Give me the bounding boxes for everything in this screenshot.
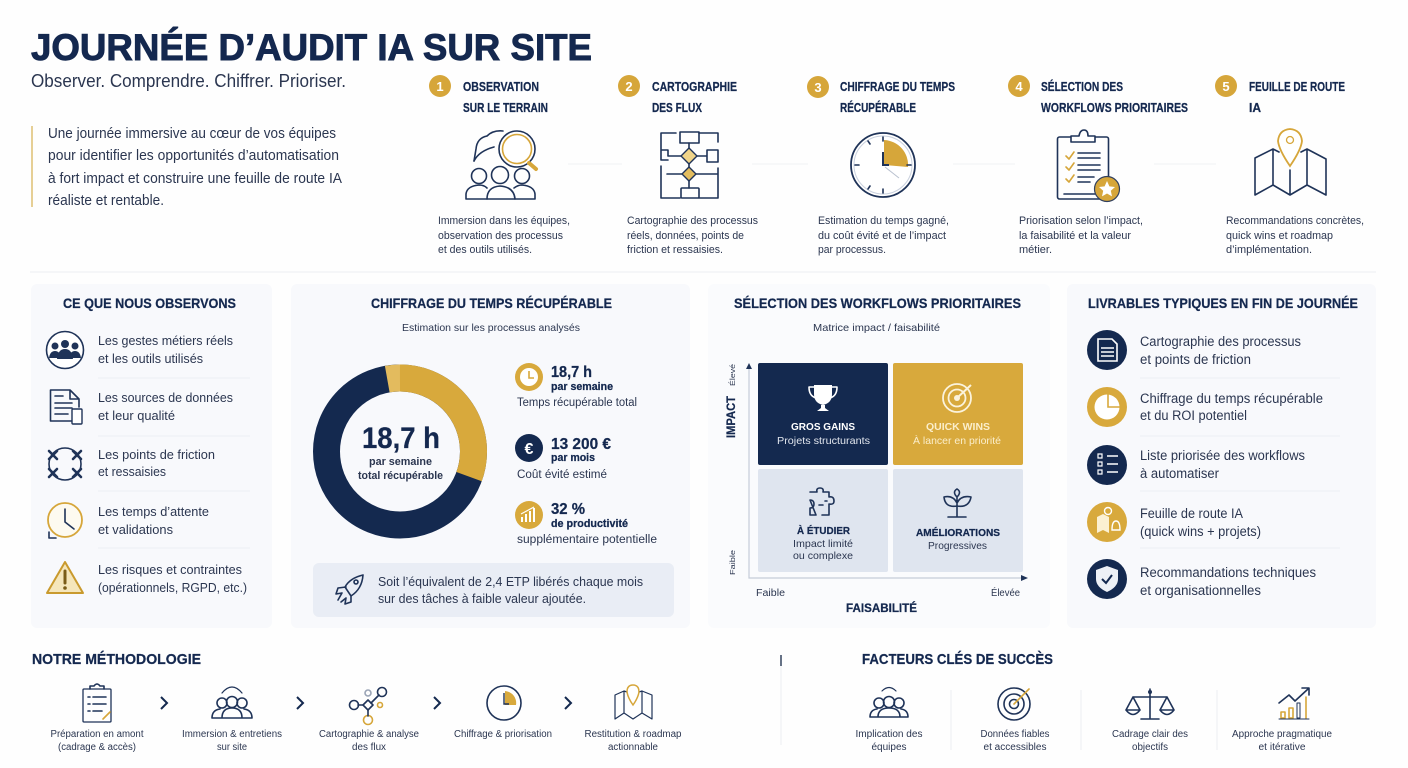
icon: pie badge: [1087, 387, 1127, 427]
step 2: cartographie des flux: 2: [625, 79, 633, 94]
icon: team in circle: [46, 332, 84, 368]
arrow 4: [565, 697, 571, 709]
icon: map with pin: [1255, 129, 1326, 195]
step 2: cartographie des flux: friction et ressaisies.: [627, 244, 723, 256]
quadrant: à étudier: [758, 469, 888, 572]
panel: sélection des workflows prioritaires: [708, 284, 1050, 628]
quadrant: gros gains: GROS GAINS: [791, 421, 855, 433]
icon: target: [998, 688, 1030, 720]
item: chiffrage: et du ROI potentiel: [1140, 408, 1247, 423]
stat: temps récupérable: [515, 363, 637, 409]
icon: people and magnifier: [466, 131, 536, 199]
label: implication: Implication des: [856, 729, 922, 740]
subtitle: Observer. Comprendre. Chiffrer. Prioriser.: [31, 71, 346, 91]
label: données fiables: Données fiables: [980, 729, 1050, 740]
item: cartographie: Cartographie des processus: [1140, 334, 1301, 349]
item: sources de données: [98, 390, 233, 423]
step 5: feuille de route IA: Recommandations concrètes,: [1226, 215, 1364, 227]
step 1: observation sur le terrain: 1: [436, 79, 444, 94]
stat: coût évité: par mois: [551, 452, 595, 464]
item: risques et contraintes: Les risques et contraintes: [98, 562, 242, 577]
icon: document: [50, 390, 82, 424]
label: données fiables: et accessibles: [984, 742, 1046, 753]
icon: flowchart: [661, 132, 718, 198]
item: liste priorisée: Liste priorisée des workflows: [1140, 448, 1305, 463]
axis tick: élevé: Élevé: [728, 364, 737, 386]
axis label: impact: IMPACT: [724, 395, 738, 438]
item: temps d'attente: Les temps d’attente: [98, 504, 209, 519]
subheading: matrice: Matrice impact / faisabilité: [813, 322, 940, 334]
label: approche pragmatique: et itérative: [1258, 742, 1306, 753]
intro text block: réaliste et rentable.: [48, 193, 164, 209]
label: approche pragmatique: Approche pragmatique: [1232, 729, 1332, 740]
stat: coût évité: 13 200 €: [551, 436, 611, 453]
icon: growth chart: [1279, 688, 1309, 719]
quadrant: quick wins: [893, 363, 1023, 465]
item: cartographie: et points de friction: [1140, 352, 1251, 367]
step 3: chiffrage du temps récupérable: du coût évité et de l’impact: [818, 230, 946, 242]
callout: équivalent ETP: sur des tâches à faible valeur ajoutée.: [378, 591, 586, 606]
item: temps d'attente: et validations: [98, 522, 173, 537]
panel: livrables typiques: [1067, 284, 1376, 628]
label: préparation: [50, 729, 144, 753]
step 3: chiffrage du temps récupérable: RÉCUPÉRABLE: [840, 100, 916, 115]
step 4: sélection des workflows prioritaires: 4: [1015, 79, 1023, 94]
step 1: observation sur le terrain: et des outils utilisés.: [438, 244, 532, 256]
quadrant: à étudier: À ÉTUDIER: [797, 524, 850, 537]
label: données fiables: [980, 729, 1050, 753]
heading: observons: CE QUE NOUS OBSERVONS: [63, 295, 236, 311]
stat: productivité: [515, 501, 657, 546]
title: JOURNÉE D’AUDIT IA SUR SITE: [31, 27, 592, 68]
item: chiffrage: [1140, 391, 1323, 423]
item: points de friction: Les points de friction: [98, 447, 215, 462]
label: immersion: Immersion & entretiens: [182, 729, 282, 740]
item: liste priorisée: à automatiser: [1140, 466, 1219, 481]
intro text block: à fort impact et construire une feuille de route IA: [48, 171, 342, 187]
icon: checklist badge: [1087, 445, 1127, 485]
quadrant: quick wins: QUICK WINS: [926, 421, 990, 433]
item: gestes métiers: [98, 333, 233, 366]
icon: friction cycle: [49, 448, 81, 480]
icon: document badge: [1087, 330, 1127, 370]
step 1: observation sur le terrain: OBSERVATION: [463, 79, 539, 94]
section: notre méthodologie: NOTRE MÉTHODOLOGIE: [32, 651, 201, 668]
icon: small map: [615, 685, 652, 719]
heading: sélection: SÉLECTION DES WORKFLOWS PRIORITAIRES: [734, 295, 1021, 311]
item: feuille de route: (quick wins + projets): [1140, 524, 1261, 539]
icon: network: [350, 688, 386, 724]
label: immersion: sur site: [217, 742, 247, 753]
step 2: cartographie des flux: Cartographie des processus: [627, 215, 759, 227]
item: sources de données: et leur qualité: [98, 408, 175, 423]
intro text block: pour identifier les opportunités d’automatisation: [48, 148, 339, 164]
step 2: cartographie des flux: réels, données, points de: [627, 230, 744, 242]
arrow 1: [161, 697, 167, 709]
step 1: observation sur le terrain: Immersion dans les équipes,: [438, 215, 570, 227]
step 4: sélection des workflows prioritaires: SÉLECTION DES: [1041, 79, 1123, 94]
step 4: sélection des workflows prioritaires: [1008, 75, 1188, 256]
label: cadrage clair: objectifs: [1132, 742, 1168, 753]
stat: coût évité: Coût évité estimé: [517, 469, 607, 481]
icon: rocket: [336, 575, 363, 604]
item: points de friction: et ressaisies: [98, 464, 166, 479]
label: implication: équipes: [872, 742, 906, 753]
section: facteurs clés de succès: FACTEURS CLÉS DE SUCCÈS: [862, 651, 1053, 668]
step 4: sélection des workflows prioritaires: WORKFLOWS PRIORITAIRES: [1041, 100, 1188, 115]
axis tick: faible horizontal: Faible: [756, 588, 785, 599]
step 3: chiffrage du temps récupérable: [807, 76, 955, 256]
quadrant: à étudier: ou complexe: [793, 550, 853, 562]
icon: plant: [944, 489, 971, 517]
item: gestes métiers: et les outils utilisés: [98, 351, 203, 366]
label: implication: [856, 729, 922, 753]
quadrant: améliorations: [893, 469, 1023, 572]
icon: target: [943, 384, 971, 412]
step 5: feuille de route IA: FEUILLE DE ROUTE: [1249, 79, 1345, 94]
matrix axes: [746, 363, 1028, 581]
item: recommandations: [1140, 565, 1316, 598]
label: cartographie et analyse: Cartographie & analyse: [319, 729, 419, 740]
stat: temps récupérable: Temps récupérable total: [517, 397, 637, 409]
donut chart: [326, 378, 474, 525]
step 1: observation sur le terrain: SUR LE TERRAIN: [463, 100, 548, 115]
stat: temps récupérable: par semaine: [551, 381, 613, 393]
icon: warning triangle: [47, 562, 83, 593]
item: risques et contraintes: (opérationnels, RGPD, etc.): [98, 580, 247, 595]
label: cartographie et analyse: des flux: [352, 742, 386, 753]
item: feuille de route: [1140, 506, 1261, 539]
stat: productivité: 32 %: [551, 501, 585, 518]
label: restitution: actionnable: [608, 742, 658, 753]
item: chiffrage: Chiffrage du temps récupérable: [1140, 391, 1323, 406]
callout: équivalent ETP: Soit l’équivalent de 2,4 ETP libérés chaque mois: [378, 574, 643, 589]
icon: trophy: [809, 385, 837, 411]
label: restitution: Restitution & roadmap: [584, 729, 682, 740]
label: approche pragmatique: [1232, 729, 1332, 753]
icon: team: [870, 688, 908, 717]
section: notre méthodologie: [32, 651, 682, 753]
step 5: feuille de route IA: [1215, 75, 1364, 256]
item: sources de données: Les sources de données: [98, 390, 233, 405]
step 3: chiffrage du temps récupérable: par processus.: [818, 244, 886, 256]
quadrant: améliorations: AMÉLIORATIONS: [916, 526, 1000, 539]
panel: ce que nous observons: [31, 284, 272, 628]
icon: puzzle: [810, 488, 834, 515]
quadrant: gros gains: [758, 363, 888, 465]
intro text block: Une journée immersive au cœur de vos équipes: [48, 126, 336, 142]
icon: small clock: [487, 686, 521, 720]
icon: gold clock: [48, 503, 82, 538]
label: restitution: [584, 729, 682, 753]
step 2: cartographie des flux: DES FLUX: [652, 100, 702, 115]
step 5: feuille de route IA: quick wins et roadmap: [1226, 230, 1333, 242]
intro text block: [31, 126, 342, 209]
subheading: estimation: Estimation sur les processus analysés: [402, 322, 580, 334]
donut chart: total récupérable: [358, 470, 443, 482]
label: chiffrage et priorisation: Chiffrage & priorisation: [454, 729, 552, 740]
heading: chiffrage: CHIFFRAGE DU TEMPS RÉCUPÉRABLE: [371, 295, 612, 311]
quadrant: à étudier: Impact limité: [793, 538, 853, 550]
step 3: chiffrage du temps récupérable: CHIFFRAGE DU TEMPS: [840, 79, 955, 94]
item: liste priorisée: [1140, 448, 1305, 481]
axis tick: faible: Faible: [730, 550, 737, 575]
axis tick: élevée horizontal: Élevée: [991, 586, 1020, 599]
item: risques et contraintes: [98, 562, 247, 595]
item: recommandations: et organisationnelles: [1140, 583, 1261, 598]
section: facteurs clés de succès: [856, 651, 1332, 753]
arrow 3: [434, 697, 440, 709]
step 5: feuille de route IA: d’implémentation.: [1226, 244, 1312, 256]
step 1: observation sur le terrain: observation des processus: [438, 230, 564, 242]
arrow 2: [297, 697, 303, 709]
label: préparation: Préparation en amont: [50, 729, 144, 740]
step 3: chiffrage du temps récupérable: 3: [814, 80, 822, 95]
icon: checklist: [83, 684, 111, 722]
callout: équivalent ETP: [313, 563, 674, 617]
step 4: sélection des workflows prioritaires: métier.: [1019, 244, 1052, 256]
label: cartographie et analyse: [319, 729, 419, 753]
item: points de friction: [98, 447, 215, 479]
label: cadrage clair: [1112, 729, 1188, 753]
icon: team: [212, 687, 252, 718]
axis label: faisabilité: FAISABILITÉ: [846, 600, 917, 615]
item: feuille de route: Feuille de route IA: [1140, 506, 1243, 521]
step 2: cartographie des flux: CARTOGRAPHIE: [652, 79, 737, 94]
item: gestes métiers: Les gestes métiers réels: [98, 333, 233, 348]
donut chart: par semaine: [369, 456, 432, 468]
item: recommandations: Recommandations techniques: [1140, 565, 1316, 580]
step 4: sélection des workflows prioritaires: Priorisation selon l’impact,: [1019, 215, 1143, 227]
step 5: feuille de route IA: 5: [1222, 79, 1230, 94]
stat: productivité: de productivité: [551, 518, 628, 530]
label: immersion: [182, 729, 282, 753]
icon: clipboard with star badge: [1058, 130, 1120, 202]
heading: livrables: LIVRABLES TYPIQUES EN FIN DE JOURNÉE: [1088, 295, 1358, 311]
icon: clock with gold wedge: [851, 133, 915, 197]
quadrant: améliorations: Progressives: [928, 540, 987, 552]
icon: shield badge: [1087, 559, 1127, 599]
item: temps d'attente: [98, 504, 209, 537]
step 4: sélection des workflows prioritaires: la faisabilité et la valeur: [1019, 230, 1131, 242]
step 1: observation sur le terrain: [429, 75, 570, 256]
stat: coût évité: [515, 434, 611, 481]
icon: map badge: [1087, 502, 1127, 542]
step 3: chiffrage du temps récupérable: Estimation du temps gagné,: [818, 215, 949, 227]
stat: productivité: supplémentaire potentielle: [517, 534, 657, 546]
label: préparation: (cadrage & accès): [58, 742, 136, 753]
label: cadrage clair: Cadrage clair des: [1112, 729, 1188, 740]
stat: temps récupérable: 18,7 h: [551, 364, 592, 381]
step 2: cartographie des flux: [618, 75, 759, 256]
panel: chiffrage du temps récupérable: [291, 284, 690, 628]
donut chart: 18,7 h: [362, 422, 440, 455]
step 5: feuille de route IA: IA: [1249, 100, 1262, 115]
stat: coût évité: €: [525, 441, 534, 458]
icon: scales: [1126, 689, 1174, 719]
item: cartographie: [1140, 334, 1301, 367]
quadrant: quick wins: À lancer en priorité: [913, 434, 1001, 447]
quadrant: gros gains: Projets structurants: [777, 435, 870, 447]
